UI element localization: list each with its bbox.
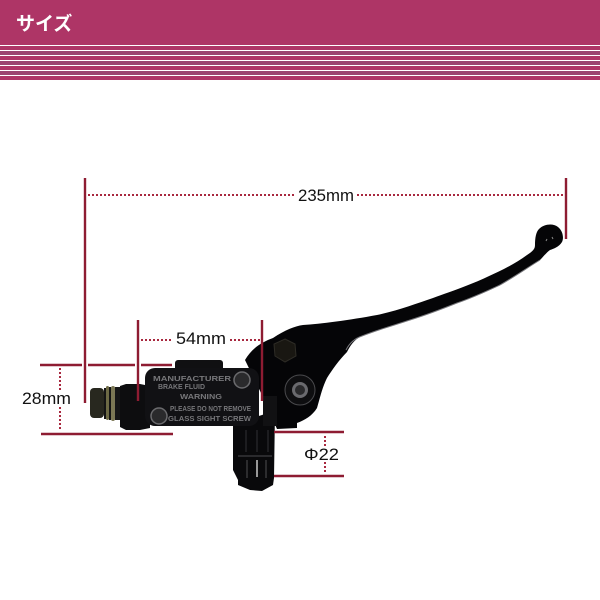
lever highlight bbox=[346, 260, 540, 350]
clamp highlights bbox=[238, 430, 272, 478]
engraved plate text bbox=[153, 376, 251, 423]
dimension: diameter 22 bbox=[274, 432, 344, 476]
engraved plate text: GLASS SIGHT SCREW bbox=[168, 416, 251, 423]
engraved plate text: PLEASE DO NOT REMOVE bbox=[170, 406, 251, 413]
dimension: 235mm: 235mm bbox=[298, 186, 354, 205]
pivot barrel bbox=[285, 375, 315, 405]
lever arm bbox=[245, 225, 563, 429]
engraved plate text: BRAKE FLUID bbox=[158, 384, 205, 391]
cover screw top bbox=[234, 372, 250, 388]
cover screw bottom bbox=[151, 408, 167, 424]
lever tip detail bbox=[546, 237, 553, 241]
master cylinder body bbox=[145, 368, 259, 426]
heading: サイズ bbox=[16, 12, 72, 35]
threaded end bbox=[90, 388, 104, 418]
pivot bolt bbox=[274, 339, 296, 362]
engraved plate text: WARNING bbox=[180, 394, 223, 401]
reservoir cap bbox=[175, 360, 223, 372]
dimension: 54mm bbox=[138, 320, 262, 401]
brake lever product image bbox=[90, 225, 563, 491]
clamp body bbox=[233, 410, 275, 491]
dimension: 54mm: 54mm bbox=[176, 329, 226, 348]
brass rings bbox=[104, 386, 120, 421]
dimension: 28mm: 28mm bbox=[22, 389, 71, 408]
banjo nub body bbox=[120, 384, 150, 430]
dimension: diameter 22: Φ22 bbox=[304, 445, 339, 464]
header banner bbox=[0, 0, 600, 80]
clamp ear bbox=[263, 396, 277, 426]
engraved plate text: MANUFACTURER bbox=[153, 376, 231, 383]
